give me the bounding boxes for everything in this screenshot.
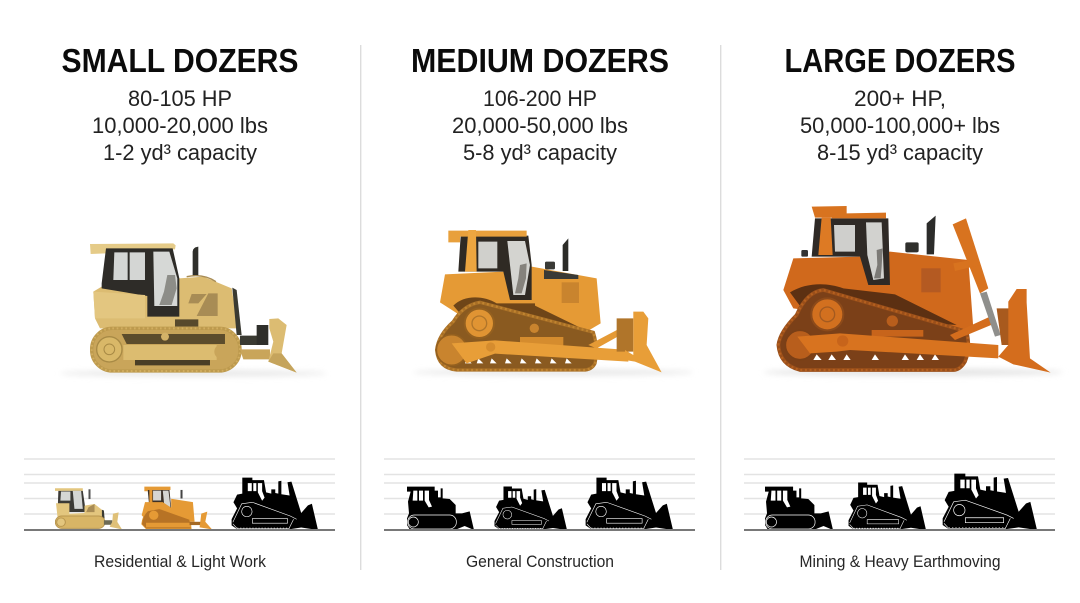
caption: large dozers: Mining & Heavy Earthmoving bbox=[800, 553, 1000, 571]
size comparison chart: large range bbox=[744, 459, 1055, 530]
caption: small dozers: Residential & Light Work bbox=[94, 553, 267, 571]
caption: medium dozers: General Construction bbox=[466, 553, 614, 571]
panel: medium dozers bbox=[384, 42, 695, 571]
specs: small dozers: 1-2 yd³ capacity bbox=[103, 140, 258, 165]
panel: small dozers bbox=[24, 42, 335, 571]
illustration: medium orange dozer bbox=[413, 230, 693, 376]
heading: small dozers: SMALL DOZERS bbox=[62, 42, 298, 79]
specs: large dozers bbox=[800, 86, 1000, 165]
heading: medium dozers: MEDIUM DOZERS bbox=[411, 42, 669, 79]
panel divider right bbox=[720, 45, 721, 570]
specs: large dozers: 200+ HP, bbox=[854, 86, 946, 111]
specs: large dozers: 50,000-100,000+ lbs bbox=[800, 113, 1000, 138]
specs: large dozers: 8-15 yd³ capacity bbox=[817, 140, 984, 165]
specs: medium dozers: 106-200 HP bbox=[483, 86, 597, 111]
panel: large dozers bbox=[744, 42, 1063, 571]
heading: large dozers: LARGE DOZERS bbox=[784, 42, 1016, 79]
specs: medium dozers: 20,000-50,000 lbs bbox=[452, 113, 628, 138]
panel divider left bbox=[360, 45, 361, 570]
size comparison chart: small highlighted bbox=[24, 459, 335, 530]
illustration: large dark-orange dozer bbox=[763, 206, 1063, 376]
specs: small dozers: 10,000-20,000 lbs bbox=[92, 113, 268, 138]
illustration: small tan dozer bbox=[60, 243, 327, 377]
size comparison chart: medium range bbox=[384, 459, 695, 530]
specs: small dozers: 80-105 HP bbox=[128, 86, 232, 111]
specs: medium dozers bbox=[452, 86, 628, 165]
specs: medium dozers: 5-8 yd³ capacity bbox=[463, 140, 618, 165]
specs: small dozers bbox=[92, 86, 268, 165]
